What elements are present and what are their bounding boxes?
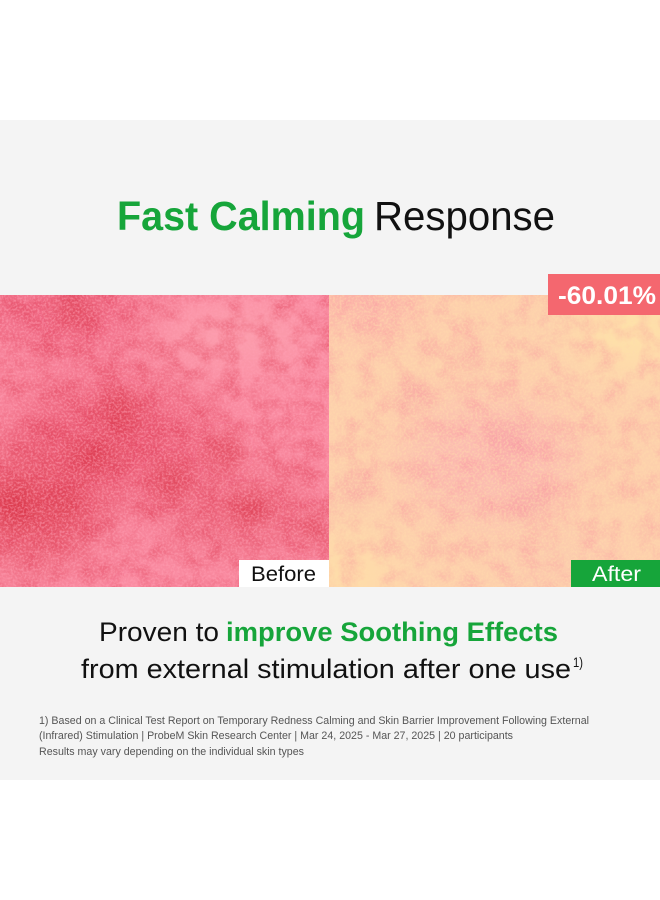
panel: before skin image	[0, 287, 329, 587]
footnote: (Infrared) Stimulation | ProbeM Skin Research Center | Mar 24, 2025 - Mar 27, 2025 | 20 participants	[39, 730, 513, 742]
subheading: from external stimulation after one use	[81, 654, 571, 684]
badge: -60.01%	[548, 274, 660, 315]
panel: after skin image	[329, 295, 660, 587]
subheading: 1)	[573, 654, 583, 670]
subheading: Proven to	[99, 617, 219, 647]
footnote: Results may vary depending on the individual skin types	[39, 746, 304, 758]
infographic canvas	[0, 120, 660, 780]
footnote: 1) Based on a Clinical Test Report on Temporary Redness Calming and Skin Barrier Improvement Following External	[39, 715, 589, 727]
label: after: After	[592, 563, 641, 586]
badge: -60.01%: -60.01%	[558, 282, 656, 310]
title	[117, 193, 555, 239]
label: after	[571, 560, 660, 587]
title: Fast Calming	[117, 193, 365, 239]
label: before	[239, 560, 329, 587]
subheading: improve Soothing Effects	[226, 617, 558, 647]
label: before: Before	[251, 563, 316, 586]
background band	[0, 120, 660, 780]
subheading	[81, 617, 583, 684]
title: Response	[374, 193, 555, 239]
footnote	[39, 715, 589, 758]
